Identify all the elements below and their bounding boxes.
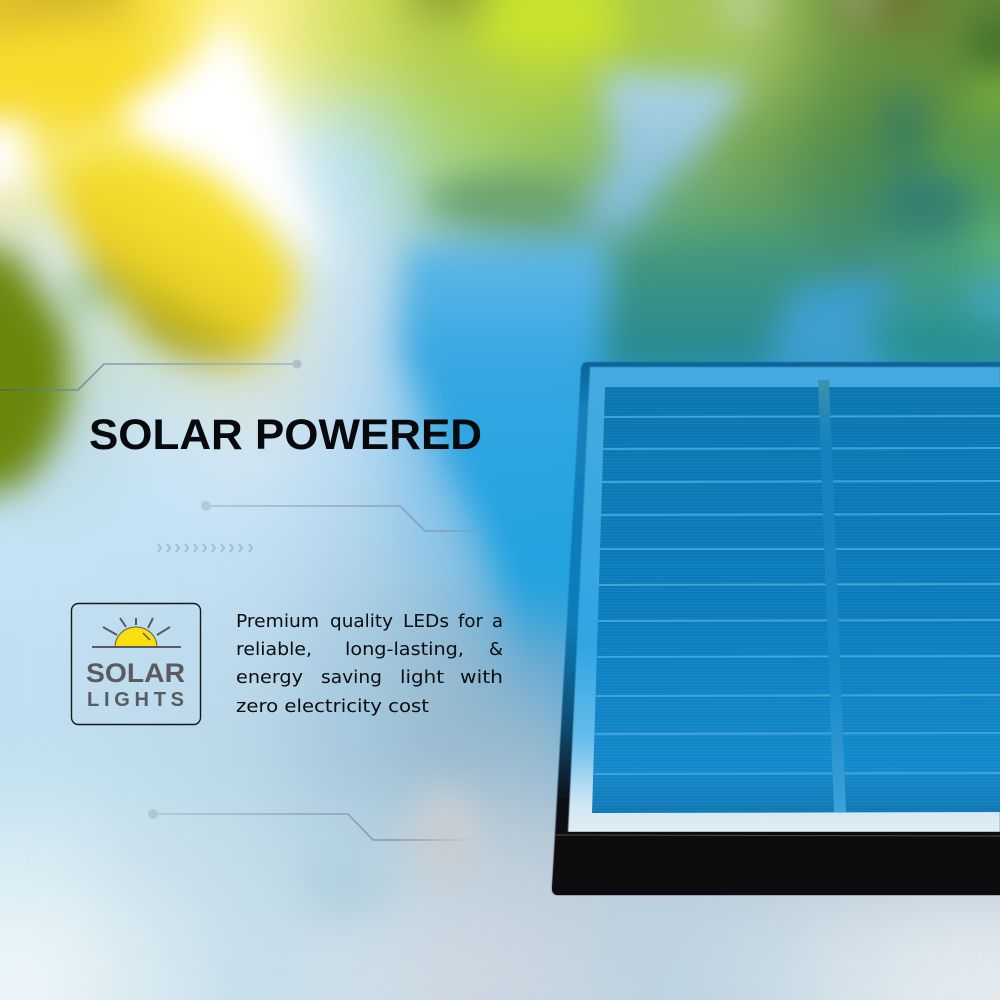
chevrons row [158,544,252,552]
cell texture [592,387,1000,813]
description text: & [489,639,503,660]
cell divider lines [594,416,1000,774]
blue grey hollow [66,268,118,312]
badge frame [72,604,200,724]
description text: long-lasting, [345,639,464,660]
white sun glare [125,20,325,265]
title: SOLAR POWERED [89,411,482,459]
blue sky zone [400,240,610,655]
description text: light [400,667,444,688]
pale blue gap [578,70,752,232]
description text: reliable, [236,639,312,660]
decorative line top left [0,360,302,390]
icon: solar lights badge [72,604,200,724]
black bottom band [552,832,1000,895]
icon: sun [92,618,181,647]
description text: energy [236,667,303,688]
decorative line bottom [148,809,474,840]
description text: Premium [236,611,319,632]
blue patch [770,272,905,366]
panel cell field [592,387,1000,813]
decorative line middle [201,501,488,531]
grey mist [407,785,483,885]
description text [236,611,503,717]
yellow blur [58,151,296,363]
green leaf blur [0,240,70,498]
description text: LEDs [403,611,449,632]
teal foliage [600,230,840,365]
description text: quality [330,611,393,632]
band highlight [556,835,1000,836]
solar panel [552,362,1000,895]
busbar [818,380,846,812]
description text: for [458,611,484,632]
description text: saving [321,667,382,688]
panel inner border [568,367,1000,832]
description text: a [492,611,503,632]
description text: with [460,667,503,688]
panel outer frame [552,362,1000,895]
badge text: LIGHTS: LIGHTS [87,689,184,711]
badge text: SOLAR: SOLAR [86,658,185,688]
description text: zero electricity cost [236,696,429,717]
